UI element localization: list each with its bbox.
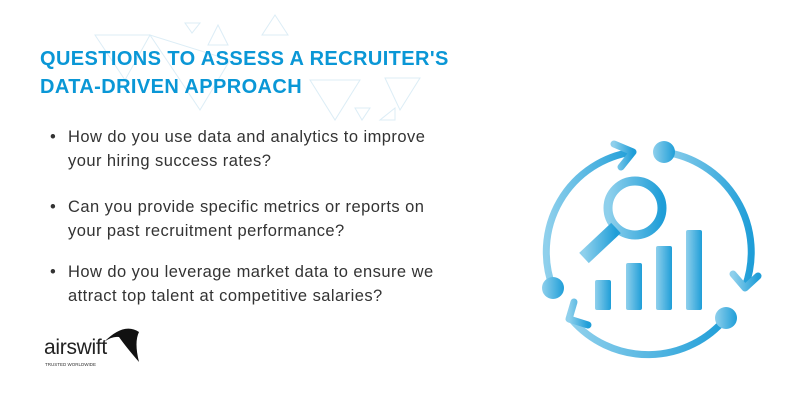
title [40, 48, 449, 98]
background triangle pattern [94, 14, 421, 121]
bullet 2: Can you provide specific metrics or reports on your past recruitment performance? [68, 198, 424, 240]
icon: analytics cycle [542, 140, 762, 358]
title: DATA-DRIVEN APPROACH [40, 76, 302, 98]
logo: TRUSTED WORLDWIDE [45, 362, 96, 367]
logo: airswift [44, 336, 107, 359]
bullet 3: How do you leverage market data to ensure we attract top talent at competitive salaries? [68, 263, 434, 304]
logo [44, 328, 139, 367]
bullet 1: How do you use data and analytics to improve your hiring success rates? [68, 128, 425, 170]
title: QUESTIONS TO ASSESS A RECRUITER'S [40, 48, 449, 70]
